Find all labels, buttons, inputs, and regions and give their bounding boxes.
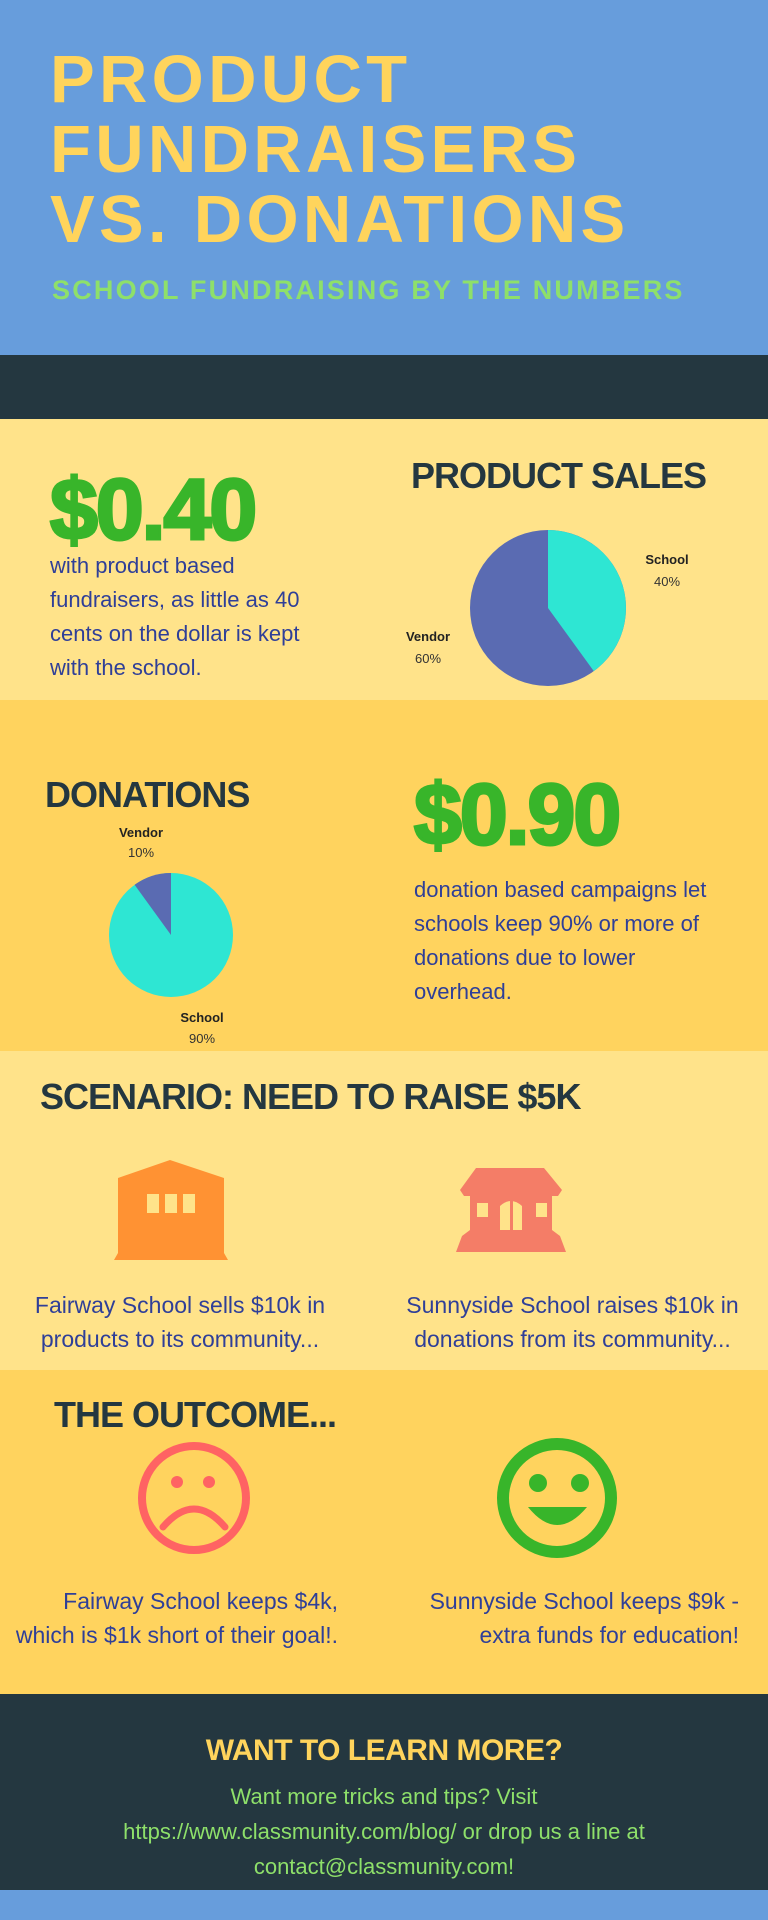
text: sunnyside outcome: Sunnyside School keeps $9k - [430, 1588, 739, 1614]
text block: contact@classmunity.com! [254, 1854, 514, 1879]
pie chart: Vendor [406, 629, 450, 644]
pie chart: School [180, 1010, 224, 1025]
icon: school building [456, 1168, 566, 1252]
heading: WANT TO LEARN MORE? [206, 1734, 562, 1767]
text: sunnyside outcome [430, 1588, 739, 1648]
subtitle: SCHOOL FUNDRAISING BY THE NUMBERS [52, 275, 685, 305]
panel: product sales [0, 419, 768, 700]
pie chart: 40% [654, 574, 680, 589]
text block: https://www.classmunity.com/blog/ or drop us a line at [123, 1819, 645, 1844]
title [50, 42, 630, 257]
text block [123, 1784, 645, 1879]
pie chart [109, 825, 233, 1046]
header panel [0, 0, 768, 355]
icon: orange building [114, 1160, 228, 1260]
text block: with product based fundraisers, as little as 40 cents on the dollar is kept with the school. [50, 553, 299, 680]
heading: DONATIONS [45, 774, 249, 815]
text: fairway outcome: which is $1k short of their goal!. [16, 1622, 338, 1648]
panel: scenario [0, 1051, 768, 1370]
panel: donations [0, 700, 768, 1051]
dark band [0, 355, 768, 419]
pie chart: 10% [128, 845, 154, 860]
text block: Want more tricks and tips? Visit [231, 1784, 537, 1809]
pie chart [406, 530, 689, 686]
heading: PRODUCT SALES [411, 455, 706, 496]
bottom band [0, 1890, 768, 1920]
text: fairway: Fairway School sells $10k in products to its community... [35, 1292, 325, 1352]
title: PRODUCT [50, 42, 411, 117]
heading: SCENARIO: NEED TO RAISE $5K [40, 1076, 580, 1117]
pie chart: 90% [189, 1031, 215, 1046]
text: sunnyside: Sunnyside School raises $10k in donations from its community... [406, 1292, 739, 1352]
icon: happy face [497, 1438, 617, 1558]
pie chart: 60% [415, 651, 441, 666]
icon: sad face [138, 1442, 250, 1554]
heading: THE OUTCOME... [54, 1394, 336, 1435]
pie chart: School [645, 552, 689, 567]
title: VS. DONATIONS [50, 182, 630, 257]
text: fairway outcome: Fairway School keeps $4k, [63, 1588, 338, 1614]
title: FUNDRAISERS [50, 112, 581, 187]
text block: donation based campaigns let schools keep 90% or more of donations due to lower overhead. [414, 877, 706, 1004]
text: sunnyside outcome: extra funds for education! [479, 1622, 739, 1648]
panel: footer [0, 1694, 768, 1890]
pie chart: Vendor [119, 825, 163, 840]
panel: outcome [0, 1370, 768, 1694]
text: fairway outcome [16, 1588, 338, 1648]
stat $0.90: $0.90 [414, 767, 619, 863]
stat $0.40: $0.40 [50, 462, 255, 558]
